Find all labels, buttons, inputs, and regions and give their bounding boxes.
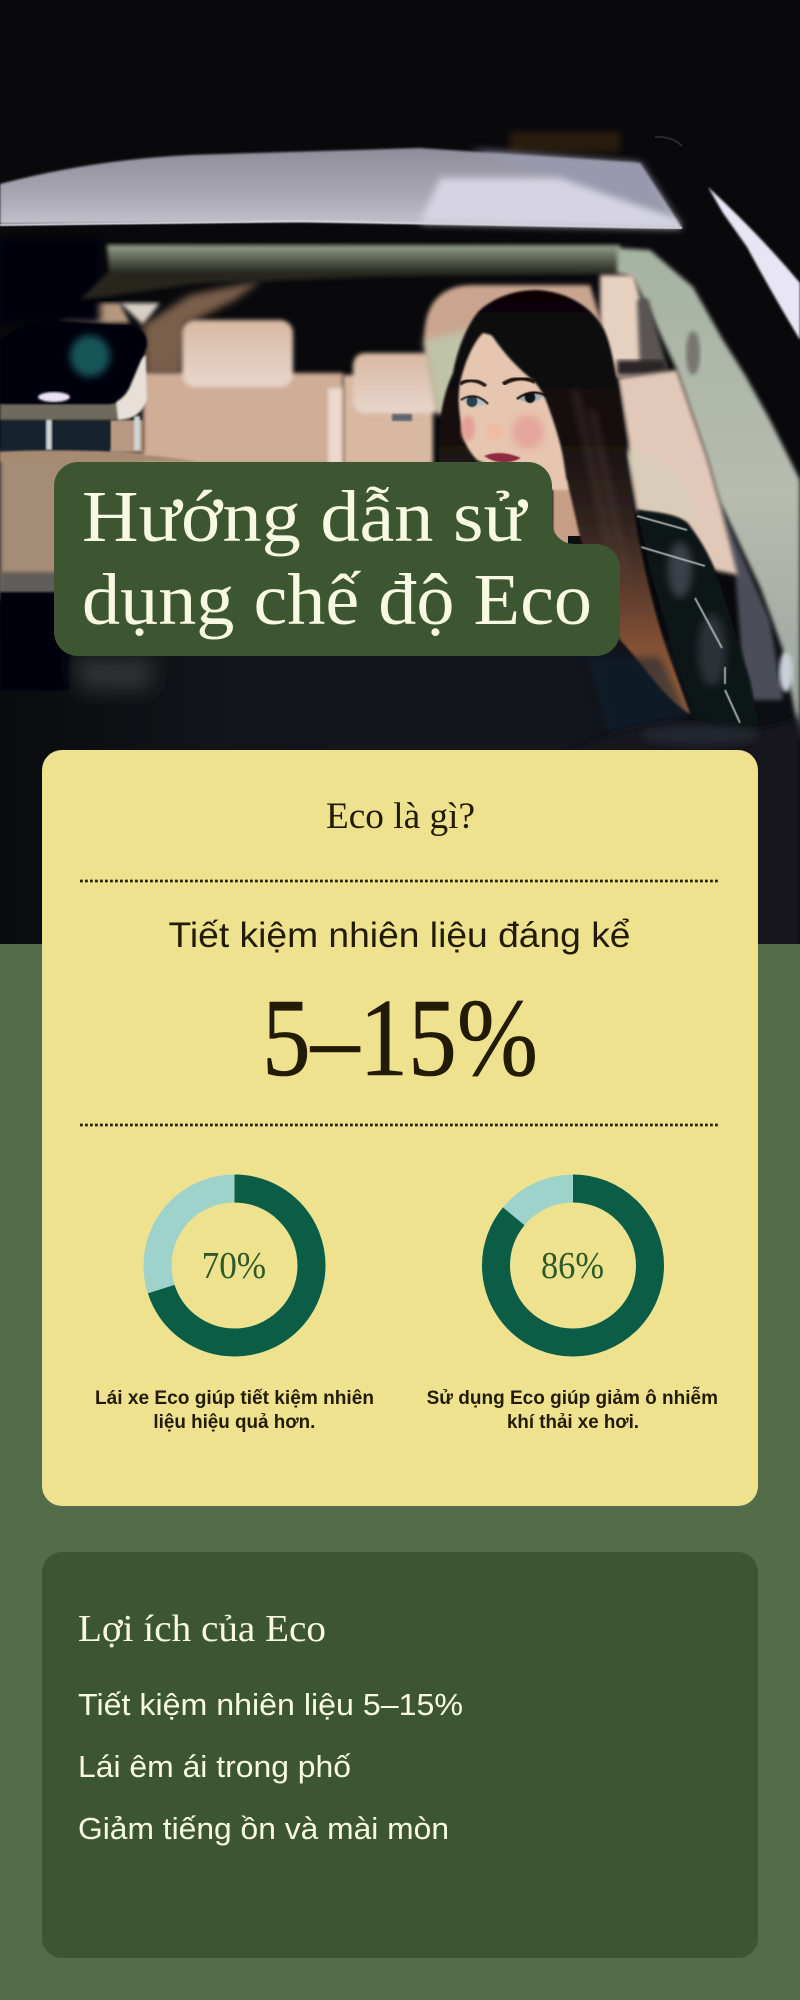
title banner: dụng chế độ Eco [82, 559, 592, 640]
woman [439, 290, 762, 742]
benefit item 2: Lái êm ái trong phố [78, 1749, 351, 1784]
title banner [54, 462, 620, 656]
caption: 70%: liệu hiệu quả hơn. [153, 1412, 315, 1433]
title banner: Hướng dẫn sử [82, 476, 529, 557]
panel: Eco la gi [42, 750, 758, 1506]
caption: 70%: Lái xe Eco giúp tiết kiệm nhiên [95, 1388, 374, 1409]
subheading: fuel saving: Tiết kiệm nhiên liệu đáng kể [168, 916, 630, 955]
hero photo: woman in car at night [0, 0, 800, 960]
donut chart: 86% [496, 1188, 650, 1342]
caption: 86% [427, 1387, 718, 1433]
heading: benefits: Lợi ích của Eco [78, 1608, 326, 1650]
donut chart: 70%: 70% [202, 1245, 266, 1287]
caption: 86%: khí thải xe hơi. [507, 1412, 639, 1433]
benefit item 3: Giảm tiếng ồn và mài mòn [78, 1811, 449, 1846]
caption: 70% [95, 1388, 374, 1433]
caption: 86%: Sử dụng Eco giúp giảm ô nhiễm [427, 1387, 718, 1409]
donut chart: 70% [158, 1188, 312, 1342]
donut chart: 86%: 86% [541, 1245, 604, 1287]
panel: benefits [42, 1552, 758, 1958]
benefit item 1: Tiết kiệm nhiên liệu 5–15% [78, 1687, 463, 1722]
big number: 5–15% [262, 977, 538, 1100]
heading: Eco la gi: Eco là gì? [326, 796, 475, 837]
icon: rear-view mirror [0, 320, 147, 404]
